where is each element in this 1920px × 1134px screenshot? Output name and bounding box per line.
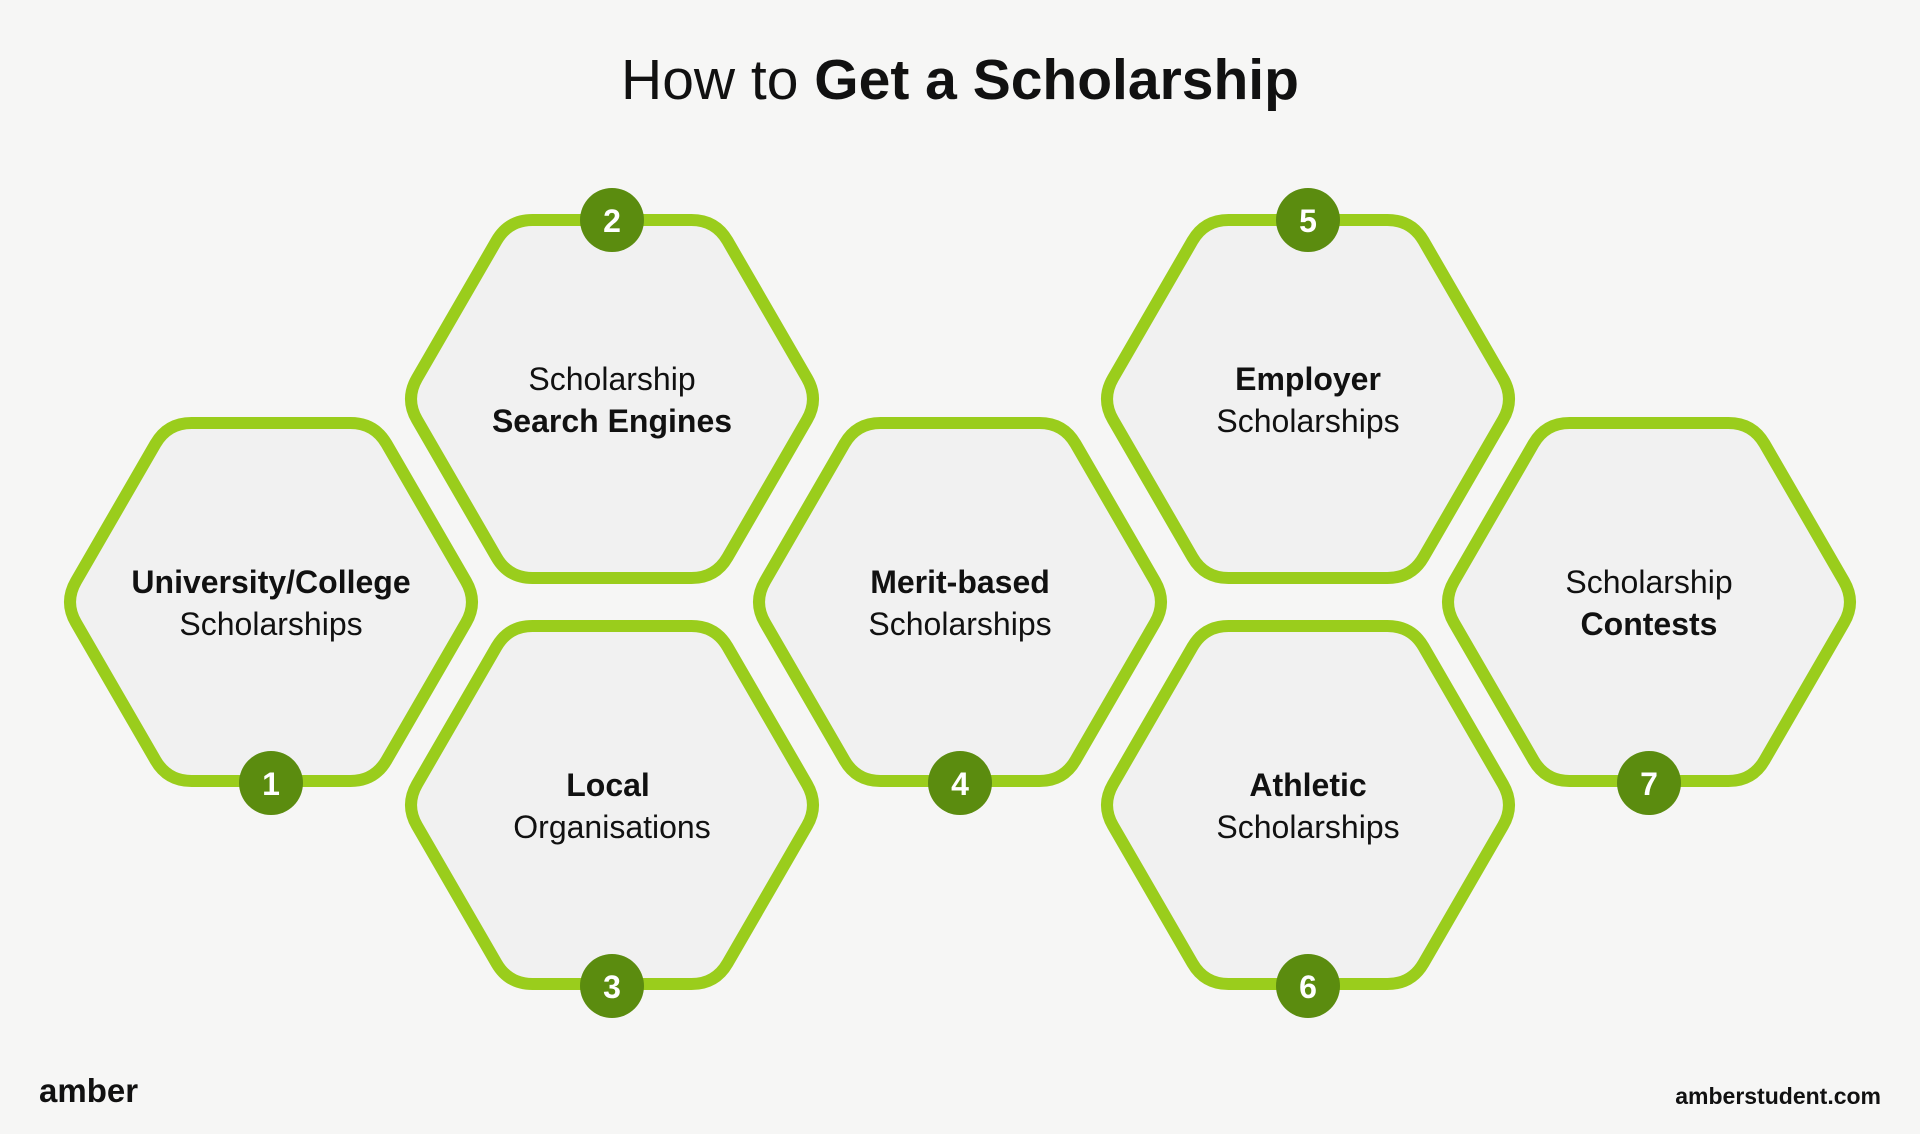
hexagon 7: Scholarship Contests [1448,423,1850,815]
badge 2: 2 [603,203,621,239]
badge 7 [1617,751,1681,815]
badge 2 [580,188,644,252]
badge 5: 5 [1299,203,1317,239]
hexagon 1: University/College Scholarships [70,423,472,815]
title: How to Get a Scholarship [621,48,1299,112]
badge 1: 1 [262,766,280,802]
hexagon 7: Scholarship Contests: Scholarship [1565,564,1733,600]
hexagon 3: Local Organisations: Organisations [513,809,711,845]
badge 3: 3 [603,969,621,1005]
website url: amberstudent.com [1675,1083,1881,1109]
hexagon 1: University/College Scholarships: Scholarships [179,606,363,642]
badge 6: 6 [1299,969,1317,1005]
logo: amber: amber [39,1072,138,1109]
badge 1 [239,751,303,815]
hexagon 6: Athletic Scholarships: Athletic [1249,767,1367,803]
hexagon 7: Scholarship Contests: Contests [1581,606,1717,642]
badge 7: 7 [1640,766,1658,802]
badge 4: 4 [951,766,969,802]
hexagon 2: Scholarship Search Engines: Scholarship [528,361,696,397]
hexagon 3: Local Organisations [411,626,813,1018]
badge 5 [1276,188,1340,252]
hexagon 5: Employer Scholarships [1107,188,1509,578]
hexagon 4: Merit-based Scholarships: Scholarships [868,606,1052,642]
hexagon 3: Local Organisations: Local [566,767,650,803]
hexagon 5: Employer Scholarships: Employer [1235,361,1381,397]
hexagon 1: University/College Scholarships: University/College [131,564,411,600]
hexagon 4: Merit-based Scholarships [759,423,1161,815]
badge 3 [580,954,644,1018]
hexagon 4: Merit-based Scholarships: Merit-based [870,564,1050,600]
hexagon 6: Athletic Scholarships: Scholarships [1216,809,1400,845]
hexagon 6: Athletic Scholarships [1107,626,1509,1018]
hexagon 5: Employer Scholarships: Scholarships [1216,403,1400,439]
hexagon 2: Scholarship Search Engines [411,188,813,578]
hexagon 2: Scholarship Search Engines: Search Engines [492,403,732,439]
badge 4 [928,751,992,815]
badge 6 [1276,954,1340,1018]
